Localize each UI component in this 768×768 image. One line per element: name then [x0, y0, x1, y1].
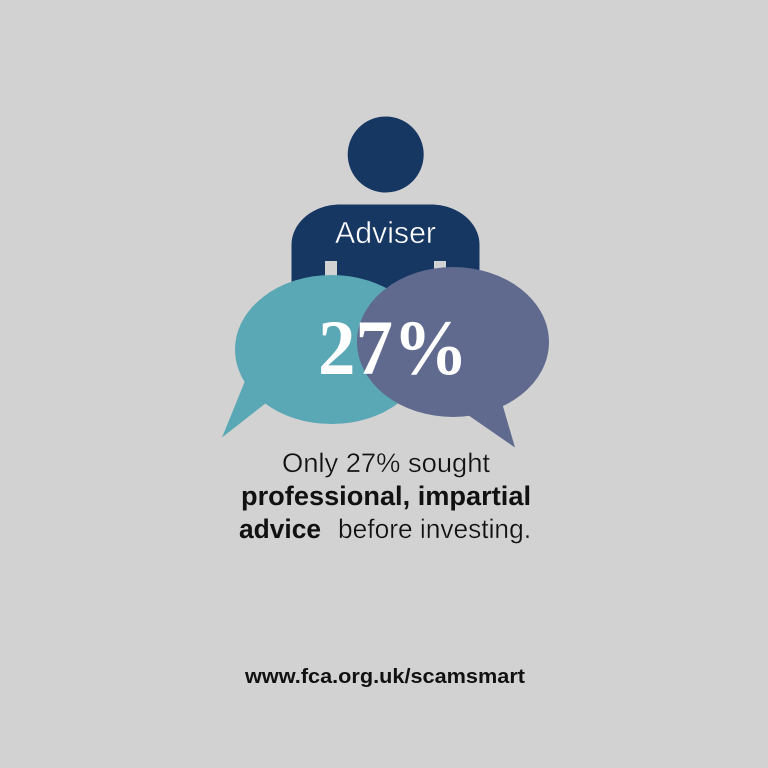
regular words: before investing.: [338, 514, 531, 544]
adviser label: Adviser: [335, 215, 436, 250]
bold word: advice: [239, 514, 321, 544]
line 1: Only 27% sought: [282, 448, 491, 478]
statistic: 27%: 27%: [318, 304, 468, 391]
line 2: professional, impartial: [241, 481, 531, 511]
website link: www.fca.org.uk/scamsmart: [244, 666, 525, 688]
speech bubble: teal: [222, 275, 428, 438]
description text: [239, 448, 531, 544]
icon: adviser head: [348, 116, 424, 192]
icon: right arm gap: [434, 261, 446, 291]
icon: adviser body: [292, 204, 480, 320]
line 3: [239, 514, 531, 544]
icon: left arm gap: [325, 261, 337, 291]
icon: adviser figure: [292, 116, 480, 320]
speech bubble: purple: [357, 267, 549, 448]
